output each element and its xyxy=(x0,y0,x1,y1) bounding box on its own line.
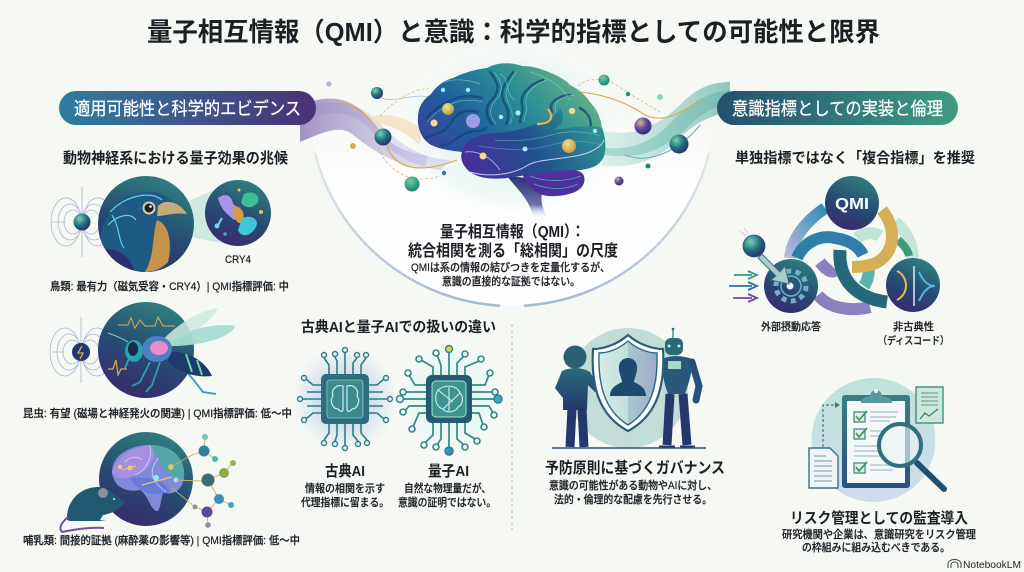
fine highlights xyxy=(427,72,574,124)
pill heading: left: 適用可能性と科学的エビデンス xyxy=(74,99,301,119)
clipboard xyxy=(842,395,910,488)
central panel: arc with brain and QMI definition: 意識の直接的な証拠ではない。 xyxy=(442,274,580,288)
label: classical AI: 古典AI xyxy=(325,462,365,480)
text: quantum AI description: 自然な物理量だが、 xyxy=(404,481,491,495)
label: CRY4: CRY4 xyxy=(225,254,251,266)
text: QMI description: QMIは系の情報の結びつきを定量化するが、 xyxy=(411,260,610,274)
heading: composite indicator: 単独指標ではなく「複合指標」を推奨 xyxy=(735,149,975,167)
heading: classical vs quantum AI: 古典AIと量子AIでの扱いの違い xyxy=(301,318,496,336)
heading: governance: 予防原則に基づくガバナンス xyxy=(545,459,725,477)
icon: insect xyxy=(98,302,235,398)
head xyxy=(125,340,143,362)
panel: risk management audit: の枠組みに組み込むべきである。 xyxy=(802,540,950,554)
chart: composite indicator triad: （ディスコード） xyxy=(878,334,949,347)
node: QMI xyxy=(825,176,879,230)
icon: bird xyxy=(98,176,194,277)
floating orbs xyxy=(326,74,688,192)
brain stem xyxy=(507,176,548,217)
central panel: arc with brain and QMI definition xyxy=(300,0,730,306)
label: external perturbation: 外部摂動応答 xyxy=(761,320,821,333)
highlight curve xyxy=(537,109,551,124)
pill heading: right xyxy=(717,91,958,125)
text: classical AI description: 情報の相関を示す xyxy=(305,481,385,495)
icon: brain disc xyxy=(99,432,193,526)
icon: magnetic field xyxy=(50,317,112,383)
caption: insects: 昆虫: 有望 (磁場と神経発火の関連) | QMI指標評価: 低〜中 xyxy=(23,406,292,420)
icon: CRY4 protein xyxy=(205,180,271,246)
icon: quantum chip xyxy=(391,341,507,457)
panel: precautionary governance: 法的・倫理的な配慮を先行させる。 xyxy=(554,492,712,506)
icon: classical chip xyxy=(293,347,397,451)
panel: risk management audit xyxy=(782,378,976,554)
label: non-classicality: 非古典性 xyxy=(893,320,934,333)
robot xyxy=(659,328,699,447)
panel: classical AI xyxy=(293,347,397,509)
text: governance description: 意識の可能性がある動物やAIに対し、 xyxy=(549,478,717,492)
human figure xyxy=(555,346,599,447)
icon: shield, human and robot xyxy=(552,328,706,448)
document left xyxy=(809,448,838,488)
node: non-classicality discord xyxy=(886,258,940,312)
caption: birds: 鳥類: 最有力（磁気受容・CRY4）| QMI指標評価: 中 xyxy=(50,279,289,293)
panel: quantum AI xyxy=(391,341,507,509)
sulci xyxy=(425,72,591,146)
wings xyxy=(158,308,218,345)
arc right xyxy=(524,153,709,306)
glowing orbs xyxy=(442,103,454,115)
icon: mouse xyxy=(60,487,125,532)
icon: magnetic field xyxy=(51,187,113,257)
icon: brain xyxy=(418,63,605,217)
dashed path arrow xyxy=(823,405,836,447)
thorax xyxy=(142,336,172,362)
panel: precautionary governance xyxy=(545,328,725,506)
icon: molecule xyxy=(172,434,236,528)
report right xyxy=(916,387,943,423)
magnifier xyxy=(917,463,944,489)
panel: insects xyxy=(23,302,292,420)
cerebrum xyxy=(418,63,605,179)
panel backdrop xyxy=(309,0,715,306)
heading: animal nervous systems: 動物神経系における量子効果の兆候 xyxy=(63,149,288,167)
arc left xyxy=(315,153,500,306)
cone to CRY4 xyxy=(172,184,228,244)
caption: mammals: 哺乳類: 間接的証拠 (麻酔薬の影響等) | QMI指標評価: 低〜中 xyxy=(23,533,300,547)
icon: audit clipboard xyxy=(809,378,944,502)
legs xyxy=(125,352,216,394)
pill heading: left xyxy=(59,91,316,125)
panel: mammals xyxy=(23,432,300,547)
node: external perturbation gear xyxy=(764,259,818,313)
panel: birds xyxy=(50,176,289,293)
heading: QMI definition: 量子相互情報（QMI）： xyxy=(440,222,585,241)
ribbons right xyxy=(578,79,730,166)
frontal lower lobe xyxy=(461,108,605,179)
icon: perturbation arrows xyxy=(729,228,789,302)
interlocking rings xyxy=(790,208,913,309)
node: QMI: QMI xyxy=(835,196,869,213)
ribbons left xyxy=(300,88,457,179)
label: quantum AI: 量子AI xyxy=(428,463,469,480)
title: 量子相互情報（QMI）と意識：科学的指標としての可能性と限界 xyxy=(147,17,880,47)
text: audit description: 研究機関や企業は、意識研究をリスク管理 xyxy=(782,527,976,541)
panel: classical AI: 代理指標に留まる。 xyxy=(301,495,389,509)
abdomen xyxy=(168,352,212,376)
central panel: arc with brain and QMI definition: 統合相関を測る「総相関」の尺度 xyxy=(408,241,618,260)
chart: composite indicator triad xyxy=(729,176,949,347)
pill heading: right: 意識指標としての実装と倫理 xyxy=(732,99,943,119)
panel: quantum AI: 意識の証明ではない。 xyxy=(398,495,496,509)
heading: audit: リスク管理としての監査導入 xyxy=(790,509,968,527)
cerebellum xyxy=(520,166,584,196)
NotebookLM watermark: NotebookLM xyxy=(963,559,1021,571)
shield xyxy=(593,335,663,431)
brain glow xyxy=(392,38,632,222)
